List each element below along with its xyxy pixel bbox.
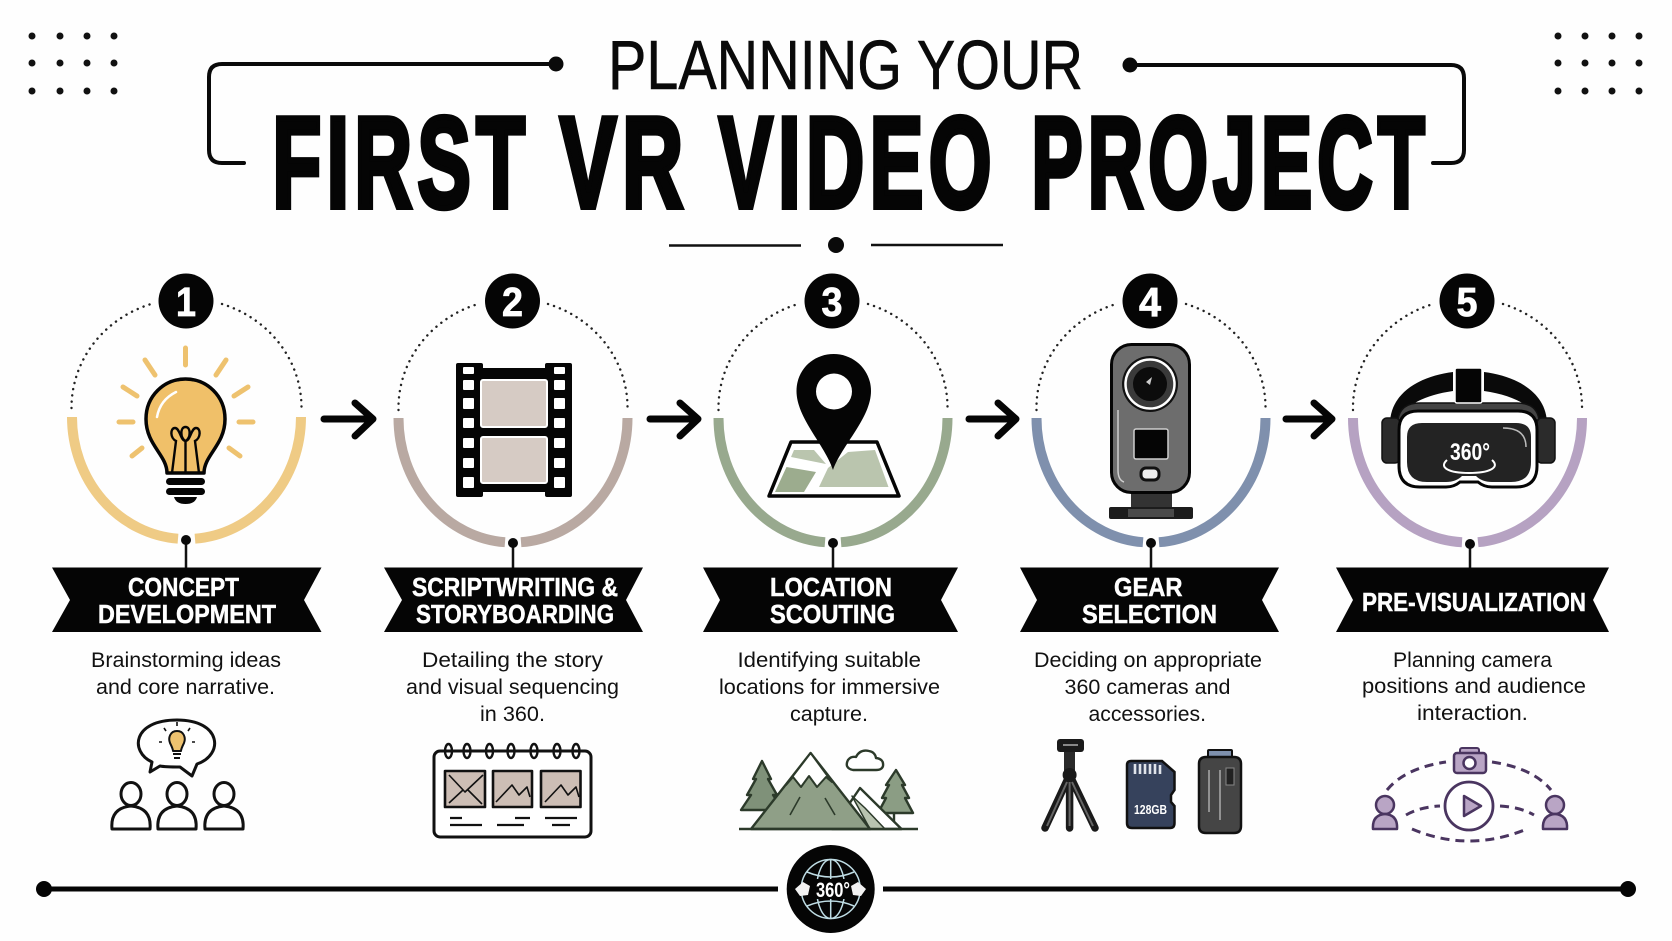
step 2 banner: STORYBOARDING bbox=[416, 599, 614, 629]
title line 2: VIDEO bbox=[719, 91, 997, 235]
arrow 4 to 5 bbox=[1286, 403, 1332, 436]
step 3: location scouting bbox=[703, 274, 958, 829]
step 5 ring bbox=[1353, 304, 1582, 568]
step 2 banner bbox=[384, 568, 643, 632]
step 5 description: Planning camera bbox=[1393, 649, 1552, 672]
step 4 number badge bbox=[1122, 274, 1178, 328]
step 3 number badge bbox=[804, 274, 860, 328]
icon: tripod bbox=[1045, 739, 1095, 828]
step 5 description: positions and audience bbox=[1362, 675, 1586, 698]
step 3 description: locations for immersive bbox=[719, 676, 940, 699]
step 5 number badge: 5 bbox=[1456, 279, 1478, 325]
footer 360 globe badge bbox=[787, 845, 875, 933]
title bracket: right bbox=[1122, 58, 1464, 163]
step 2 description bbox=[406, 649, 619, 726]
icon: mountains bbox=[739, 751, 918, 829]
step 2 banner: SCRIPTWRITING & bbox=[412, 572, 618, 602]
step 2 description: in 360. bbox=[480, 703, 545, 726]
step 1 number badge bbox=[158, 274, 214, 328]
step 5 description bbox=[1362, 649, 1586, 725]
decorative dots: top left bbox=[28, 32, 118, 94]
step 3 ring bbox=[718, 304, 948, 568]
title bbox=[272, 26, 1430, 235]
arrow 1 to 2 bbox=[324, 403, 373, 436]
step 3 description bbox=[719, 649, 940, 726]
step 4 description: 360 cameras and bbox=[1064, 676, 1230, 699]
icon: VR headset: 360° bbox=[1450, 439, 1490, 466]
icon: film strip bbox=[456, 363, 572, 497]
step 1 ring bbox=[71, 304, 302, 568]
step 5 description: interaction. bbox=[1417, 702, 1528, 725]
step 3 banner: LOCATION bbox=[770, 572, 892, 602]
icon: SD card 128GB: 128GB bbox=[1134, 802, 1167, 817]
step 2 description: and visual sequencing bbox=[406, 676, 619, 699]
step 1 description bbox=[91, 649, 281, 699]
step 1 banner bbox=[52, 568, 322, 632]
step 1 number badge: 1 bbox=[176, 279, 196, 325]
step 1: concept development bbox=[52, 274, 591, 837]
step 2 description: Detailing the story bbox=[422, 649, 604, 672]
title line 2: FIRST bbox=[272, 91, 530, 235]
step 4 banner: GEAR bbox=[1114, 572, 1183, 602]
footer 360 globe badge: 360° bbox=[816, 879, 850, 902]
step 3 number badge: 3 bbox=[822, 279, 842, 325]
title line 2 bbox=[272, 91, 1430, 235]
arrow 2 to 3 bbox=[650, 403, 698, 436]
step 3 description: capture. bbox=[790, 703, 868, 726]
decorative dots: top right bbox=[1554, 32, 1642, 94]
title bracket: left bbox=[209, 56, 564, 163]
step 5 banner bbox=[1336, 568, 1609, 632]
icon: VR headset bbox=[1382, 368, 1555, 487]
step 4 description: Deciding on appropriate bbox=[1034, 649, 1262, 672]
step 4 number badge: 4 bbox=[1139, 279, 1161, 325]
icon: camera and audience plan bbox=[1373, 748, 1567, 841]
step 1 banner: DEVELOPMENT bbox=[98, 599, 276, 629]
step 4 ring bbox=[1036, 304, 1266, 568]
step 3 description: Identifying suitable bbox=[738, 649, 921, 672]
icon: 360 camera bbox=[1109, 344, 1193, 519]
icon: battery bbox=[1199, 750, 1241, 833]
step 3 banner bbox=[703, 568, 958, 632]
icon: storyboard bbox=[434, 744, 591, 837]
step 4 description: accessories. bbox=[1088, 703, 1206, 726]
step 2 ring bbox=[398, 304, 628, 568]
step 5 number badge bbox=[1440, 274, 1494, 328]
title line 2: VR bbox=[560, 91, 689, 235]
step 5 banner: PRE-VISUALIZATION bbox=[1362, 587, 1586, 617]
step 3 banner: SCOUTING bbox=[770, 599, 895, 629]
step 2: scriptwriting and storyboarding bbox=[384, 274, 643, 726]
icon: map with pin bbox=[769, 354, 899, 496]
step 4 banner bbox=[1020, 568, 1279, 632]
step 4 banner: SELECTION bbox=[1082, 599, 1217, 629]
icon: SD card 128GB bbox=[1127, 761, 1174, 828]
icon: light bulb bbox=[119, 348, 253, 504]
step 4: gear selection bbox=[1020, 274, 1279, 833]
step 2 number badge bbox=[485, 274, 540, 328]
arrow 3 to 4 bbox=[969, 403, 1016, 436]
icon: team brainstorm bbox=[112, 720, 243, 829]
step 5: pre-visualization bbox=[1336, 274, 1609, 841]
title divider bbox=[669, 237, 1003, 253]
step 4 description bbox=[1034, 649, 1262, 726]
footer timeline bbox=[36, 845, 1636, 933]
step 1 description: and core narrative. bbox=[96, 676, 275, 699]
title line 1: PLANNING YOUR bbox=[608, 26, 1083, 104]
step 2 number badge: 2 bbox=[502, 279, 523, 325]
step 1 banner: CONCEPT bbox=[128, 572, 239, 602]
step 1 description: Brainstorming ideas bbox=[91, 649, 281, 672]
